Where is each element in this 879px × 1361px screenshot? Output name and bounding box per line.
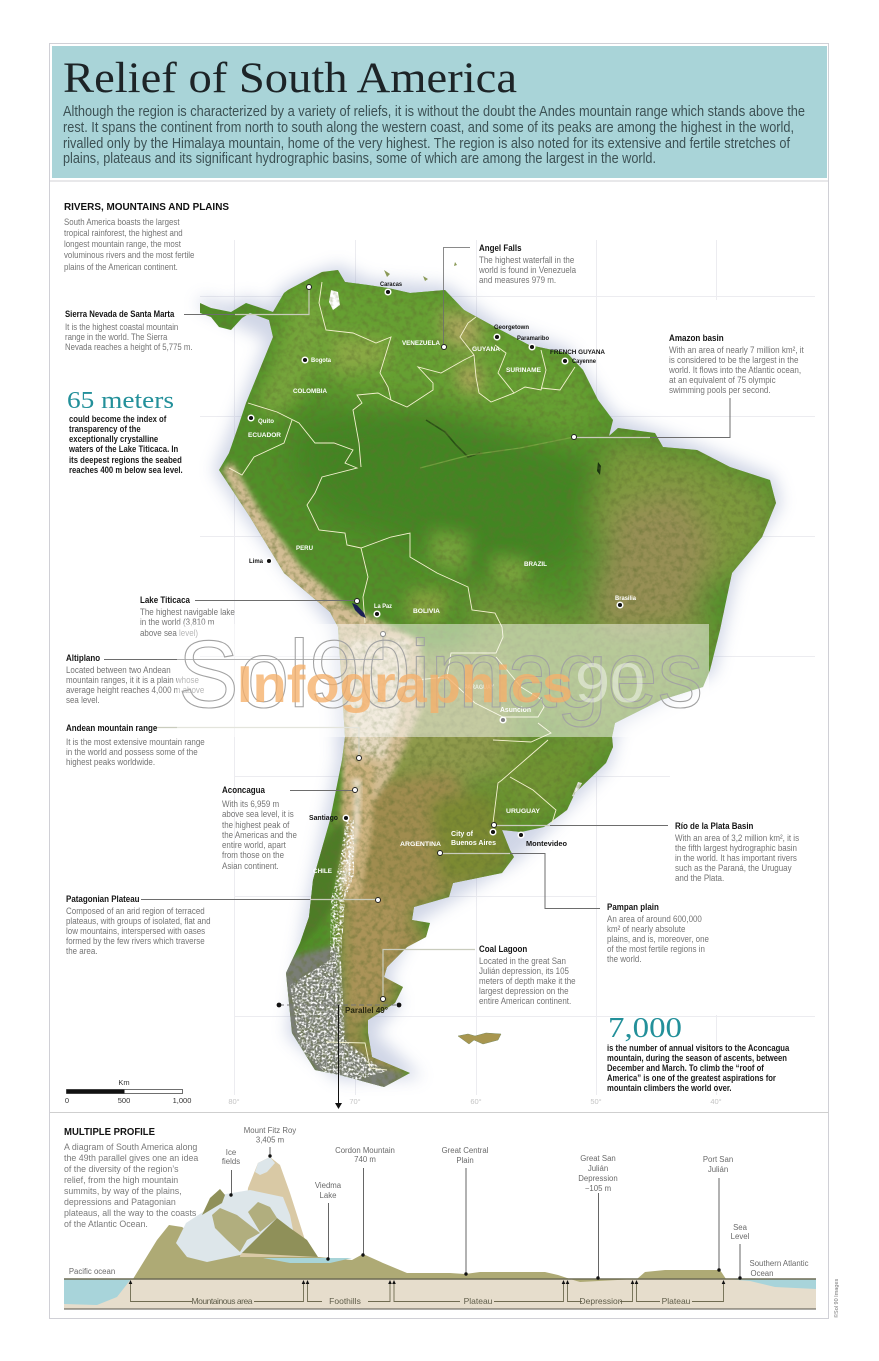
header banner [52,46,827,178]
callout: Rio de la Plata Basin: such as the Paraná, the Uruguay [675,862,792,873]
profile intro text: A diagram of South America along [64,1142,197,1152]
city labels: Caracas [380,281,402,288]
country labels: URUGUAY [506,808,541,815]
city labels: Santiago [309,813,338,822]
callout: 7,000: December and March. To climb the “roof of [607,1062,764,1073]
leader: Patagonian Plateau [141,898,378,900]
leader: Andean mountain range [155,728,359,758]
callout: Amazon basin: swimming pools per second. [669,384,771,395]
callout: Lake Titicaca [140,594,235,638]
callout: Patagonian Plateau: Composed of an arid region of terraced [66,905,205,916]
city labels: Bogota [311,357,331,364]
capital city markers [248,289,623,838]
callout: Rio de la Plata Basin [675,820,800,883]
callout: Rio de la Plata Basin: in the world. It has important rivers [675,852,797,863]
section heading: rivers, mountains and plains: RIVERS, MOUNTAINS AND PLAINS [64,201,229,213]
profile labels: Port San [703,1155,733,1164]
callout: Pampan plain [607,901,709,964]
zone labels: Mountainous area [192,1296,253,1306]
profile intro text: the 49th parallel gives one an idea [64,1153,198,1163]
profile labels: Level [731,1232,750,1241]
city labels: Georgetown [494,324,529,331]
callout: Lake Titicaca: Lake Titicaca [140,594,190,605]
profile intro text: of the diversity of the region’s [64,1164,179,1174]
country labels: FRENCH GUYANA [550,349,605,356]
callout: Patagonian Plateau: plateaus, with groups of isolated, flat and [66,915,211,926]
profile labels: 3,405 m [256,1136,284,1144]
country borders [229,282,575,1070]
leader: Aconcagua [290,790,355,792]
callout: Sierra Nevada de Santa Marta: Nevada reaches a height of 5,775 m. [65,341,193,352]
profile labels: 740 m [354,1155,376,1164]
profile intro text: summits, by way of the plains, [64,1186,182,1196]
city labels: Cayenne [572,358,596,365]
callout: 7,000: America” is one of the greatest aspirations for [607,1072,777,1083]
callout: Aconcagua: Asian continent. [222,860,279,871]
graticule degree labels: 50° [590,1097,602,1106]
callout: Rio de la Plata Basin: With an area of 3,2 million km², it is [675,832,800,843]
profile intro text [64,1142,198,1229]
city labels: Montevideo [526,839,567,848]
country labels: COLOMBIA [293,388,327,395]
section intro text: South America boasts the largest [64,216,180,227]
callout: Altiplano: Altiplano [66,652,101,663]
savanna patches [255,300,530,625]
pacific water [64,1279,131,1305]
callout: Aconcagua: above sea level, it is [222,808,294,819]
profile pointers [229,1147,742,1280]
map graticule [200,240,815,1095]
callout: Patagonian Plateau: the area. [66,945,97,956]
leader: Lake Titicaca [195,600,357,602]
callout: 65 meters: waters of the Lake Titicaca. In [68,443,178,454]
lagoon [572,782,582,797]
rivers [426,420,480,457]
section intro text [64,216,195,272]
city labels: Paramaribo [517,335,549,342]
city labels: Asuncion [500,705,531,714]
leader: Angel Falls [444,248,470,347]
continent glow [200,270,776,1075]
land base [133,1225,570,1279]
section intro text: voluminous rivers and the most fertile [64,249,195,260]
callout: Amazon basin [668,332,804,395]
land colour zones [190,260,790,1100]
leader: Altiplano [104,634,383,660]
callout: Pampan plain: the world. [607,953,642,964]
watermark band: 90 [575,651,645,714]
callout: Rio de la Plata Basin: Río de la Plata Basin [675,820,753,831]
callout: Aconcagua: the Americas and the [222,829,297,840]
callout: Amazon basin: With an area of nearly 7 million km², it [669,344,804,355]
scale bar: 0 [65,1096,69,1105]
callout: Sierra Nevada de Santa Marta: Sierra Nevada de Santa Marta [65,308,175,319]
country labels: PARAGUAY [464,684,494,691]
callout: Amazon basin: Amazon basin [669,332,724,343]
profile labels: Pacific ocean [69,1267,115,1276]
parallel 49 marker: Parallel 49° [345,1006,388,1015]
profile labels: fields [222,1157,240,1166]
profile labels: Ocean [751,1269,773,1278]
leader: Rio de la Plata Basin [494,824,668,826]
credit: ©Sol 90 Images [833,1279,840,1318]
callout: Aconcagua: the highest peak of [222,819,290,830]
caribbean islands [384,262,457,281]
callout: Patagonian Plateau: formed by the few rivers which traverse [66,935,205,946]
zone brackets [130,1283,724,1302]
section intro text: plains of the American continent. [64,261,178,272]
callout: 65 meters: transparency of the [69,423,141,434]
callout: Altiplano: mountain ranges, it it is a plain whose [66,674,199,685]
callout: Andean mountain range: highest peaks worldwide. [66,756,155,767]
callout: 65 meters: its deepest regions the seabed [69,454,182,465]
callout: Altiplano: Located between two Andean [66,664,171,675]
leader: Sierra Nevada de Santa Marta [184,287,309,314]
city labels [249,281,636,848]
zone labels: Plateau [662,1296,691,1306]
elevation profile chart [64,1126,816,1309]
section intro text: longest mountain range, the most [64,238,181,249]
country labels: ECUADOR [248,432,281,439]
callout: Coal Lagoon: Julián depression, its 105 [479,965,569,976]
callout: Patagonian Plateau [66,893,211,956]
profile labels: Great San [580,1154,616,1163]
callout: 65 meters: could become the index of [69,413,166,424]
callout: Pampan plain: Pampan plain [607,901,659,912]
profile labels: Ice [226,1148,236,1157]
scale bar [65,1078,191,1105]
tan peak [240,1157,317,1257]
callout: Coal Lagoon: Located in the great San [479,955,566,966]
callout: 65 meters: reaches 400 m below sea level. [69,464,183,475]
leader: Amazon basin [574,398,730,438]
callout: Coal Lagoon: Coal Lagoon [479,943,527,954]
graticule degree labels: 40° [710,1097,722,1106]
callout: Rio de la Plata Basin: and the Plata. [675,872,724,883]
callout: Patagonian Plateau: low mountains, interspersed with oases [66,925,206,936]
southern Andes [280,945,405,1092]
intro text: plains, plateaus and its significant hydrographic basins, some of which are among the largest in the world. [63,150,656,167]
Falkland islands [458,1033,501,1044]
ice fields [255,1157,275,1175]
callout pins [306,284,576,1002]
section heading: multiple profile: MULTIPLE PROFILE [64,1127,155,1138]
profile intro text: plateaus, all the way to the coasts [64,1208,197,1218]
city labels: La Paz [374,603,393,610]
map: relief of South America [190,260,790,1100]
country labels: CHILE [313,868,333,875]
country labels: SURINAME [506,367,542,374]
country labels [248,340,605,875]
profile labels: Great Central [442,1146,489,1155]
country labels: PERU [296,545,313,552]
callout: Andean mountain range: Andean mountain range [66,722,157,733]
profile labels [69,1126,809,1278]
callout: Angel Falls [478,242,576,285]
city labels: Quito [258,418,274,425]
callout: Pampan plain: plains, and is, moreover, one [607,933,709,944]
chile green strip [296,815,346,950]
callout: 7,000 [607,1012,790,1093]
graticule degree labels: 70° [349,1097,361,1106]
mountain lobes [212,1208,260,1252]
city labels: Brasilia [615,595,636,602]
country labels: GUYANA [472,346,500,353]
section intro text: tropical rainforest, the highest and [64,227,183,238]
profile labels: Viedma [315,1181,342,1190]
profile intro text: depressions and Patagonian [64,1197,176,1207]
callout: 7,000: 7,000 [608,1012,682,1044]
callout: Pampan plain: An area of around 600,000 [607,913,702,924]
profile labels: Lake [320,1191,336,1200]
profile labels: Cordon Mountain [335,1146,395,1155]
intro text [63,103,805,167]
callout: Aconcagua: With its 6,959 m [222,798,279,809]
callout: Amazon basin: at an equivalent of 75 olympic [669,374,776,385]
scale bar: Km [118,1078,130,1087]
callout: Andean mountain range [66,722,205,767]
city labels: City of [451,829,473,838]
profile labels: Julián [708,1165,728,1174]
profile labels: Julián [588,1164,608,1173]
country labels: ARGENTINA [400,841,441,848]
callout: Patagonian Plateau: Patagonian Plateau [66,893,140,904]
callout: Angel Falls: Angel Falls [479,242,522,253]
leader: Pampan plain [440,854,600,908]
zone labels: Depression [580,1296,623,1306]
parallel 49 marker [277,1003,401,1109]
callout: Lake Titicaca: above sea level) [140,627,198,638]
city labels: Buenos Aires [451,838,496,847]
graticule degree labels [228,1097,722,1106]
lake Maracaibo [329,290,340,310]
callout: Altiplano: average height reaches 4,000 m above [66,684,204,695]
graticule degree labels: 80° [228,1097,240,1106]
subsurface band [64,1279,816,1309]
Viedma lake [263,1258,352,1263]
Lake Titicaca water [352,603,366,618]
profile labels: Mount Fitz Roy [244,1126,296,1135]
country labels: BOLIVIA [413,608,440,615]
callout: Angel Falls: The highest waterfall in the [479,254,574,265]
callout: Pampan plain: of the most fertile regions in [607,943,705,954]
profile labels: Southern Atlantic [750,1259,809,1268]
profile labels: Plain [456,1156,474,1165]
snow [290,820,385,1085]
leader: Coal Lagoon [383,950,475,999]
profile labels: −105 m [585,1184,611,1193]
callout: 7,000: mountain, during the season of ascents, between [607,1052,787,1063]
city labels: Lima [249,558,263,565]
watermark band: Sol90images [178,621,703,728]
callout: Aconcagua: Aconcagua [222,784,265,795]
zone labels: Foothills [329,1296,361,1306]
atlantic water [727,1279,816,1289]
callout: Aconcagua: from those on the [222,849,284,860]
callout: Aconcagua: entire world, apart [222,839,286,850]
scale bar: 500 [118,1096,130,1105]
callout: Altiplano [66,652,204,705]
profile labels: Depression [578,1174,618,1183]
callout: Angel Falls: and measures 979 m. [479,274,556,285]
callout: Sierra Nevada de Santa Marta: range in the world. The Sierra [65,331,167,342]
callout: Sierra Nevada de Santa Marta [65,308,193,352]
callout: Angel Falls: world is found in Venezuela [478,264,576,275]
callout: 7,000: is the number of annual visitors to the Aconcagua [607,1042,790,1053]
zone labels: Plateau [464,1296,493,1306]
profile labels: Sea [733,1223,748,1232]
zone labels [192,1296,691,1306]
country labels: BRAZIL [524,561,547,568]
callout: Coal Lagoon: meters of depth make it the [479,975,576,986]
callout: 65 meters [67,388,183,475]
callout: Rio de la Plata Basin: the fifth largest hydrographic basin [675,842,797,853]
callout: Sierra Nevada de Santa Marta: It is the highest coastal mountain [65,321,178,332]
callout: Coal Lagoon: largest depression on the [479,985,569,996]
callout: Amazon basin: world. It flows into the Atlantic ocean, [668,364,801,375]
callout: Lake Titicaca: in the world (3,810 m [140,616,214,627]
callout: Coal Lagoon: entire American continent. [479,995,571,1006]
callout: Andean mountain range: It is the most extensive mountain range [66,736,205,747]
callout: Altiplano: sea level. [66,694,100,705]
callout: Andean mountain range: in the world and possess some of the [66,746,198,757]
callout: Pampan plain: km² of nearly absolute [607,923,686,934]
scale bar: 1,000 [173,1096,191,1105]
callout: Coal Lagoon [479,943,576,1006]
profile intro text: of the Atlantic Ocean. [64,1219,148,1229]
callout: 65 meters: 65 meters [67,388,174,414]
ground line [64,1278,816,1280]
callout: Aconcagua [222,784,297,871]
title: Relief of South America [63,55,517,102]
callout: 65 meters: exceptionally crystalline [69,433,158,444]
andes ridge [222,462,425,800]
country labels: VENEZUELA [402,340,440,347]
profile intro text: relief, from the high mountain [64,1175,178,1185]
graticule degree labels: 60° [470,1097,482,1106]
callout: 7,000: mountain climbers the world over. [607,1082,732,1093]
watermark band: Infographics [237,656,573,714]
callout: Lake Titicaca: The highest navigable lake [140,606,235,617]
callout: Amazon basin: is considered to be the largest in the [669,354,799,365]
